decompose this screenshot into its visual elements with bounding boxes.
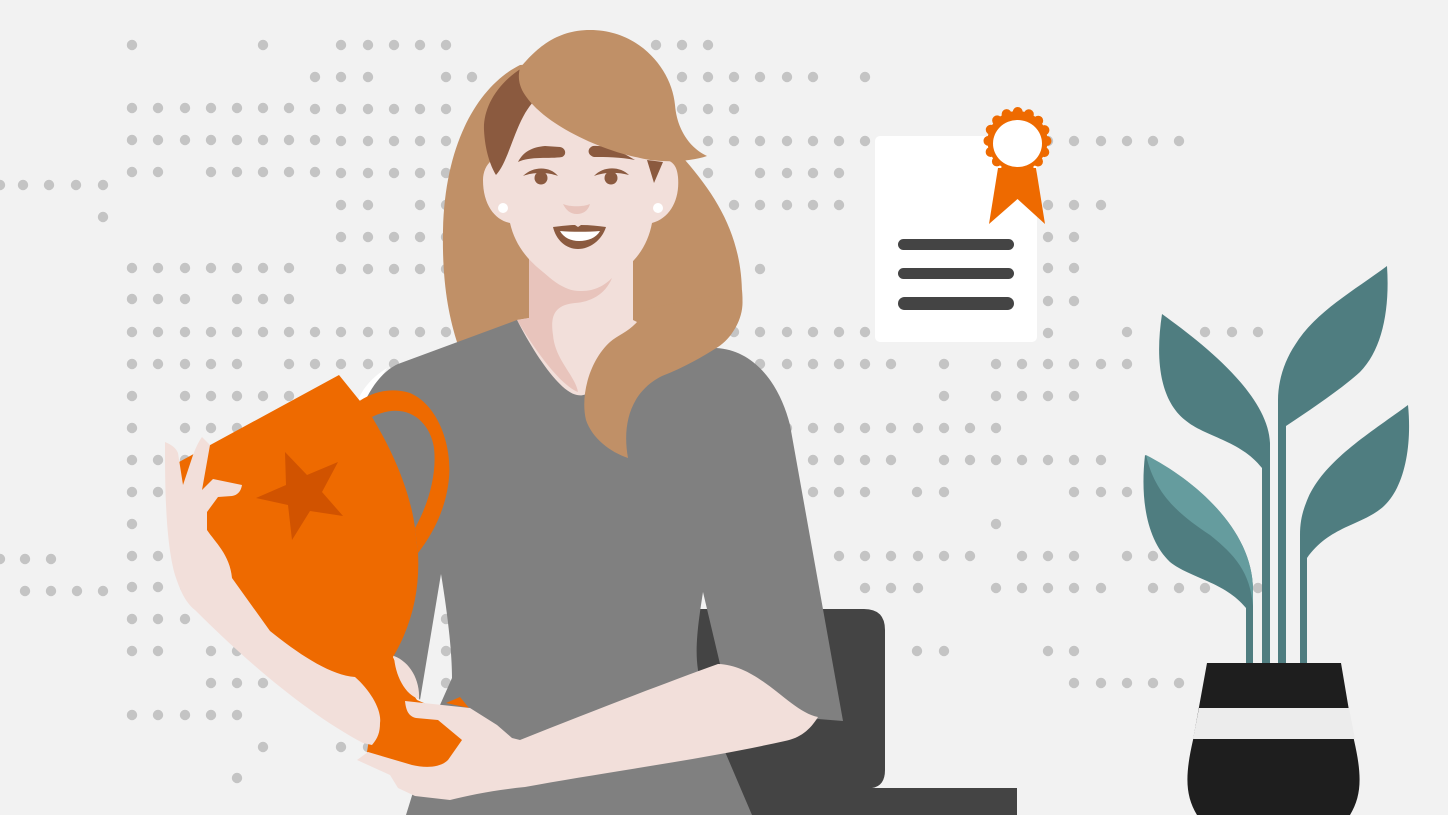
eyebrows xyxy=(518,146,635,162)
lighter leaf highlight xyxy=(1146,455,1253,606)
earrings xyxy=(498,203,663,213)
pot stripe xyxy=(1193,708,1355,739)
potted plant xyxy=(1143,266,1409,815)
front hair lock xyxy=(584,290,742,458)
right arm and hand xyxy=(357,664,818,800)
dotted world map pattern xyxy=(0,45,1258,778)
certificate text lines xyxy=(898,239,1014,310)
nose xyxy=(563,204,590,214)
hair bangs xyxy=(519,30,707,161)
neck and chest xyxy=(517,250,637,400)
dark hair strand left front xyxy=(484,68,535,175)
trophy xyxy=(175,375,470,768)
woman xyxy=(350,30,843,815)
trophy star xyxy=(256,452,343,540)
trophy base tip xyxy=(446,697,469,708)
neck shadow xyxy=(517,258,612,392)
smiling mouth xyxy=(553,225,606,249)
grey shirt xyxy=(350,320,843,815)
certificate sheet xyxy=(875,136,1037,342)
trophy bowl and stem xyxy=(175,375,470,768)
plant leaves and stems xyxy=(1143,266,1409,663)
back hair xyxy=(443,60,743,347)
left arm and hand xyxy=(165,437,380,745)
trophy handle xyxy=(358,390,449,553)
dark hair strand right xyxy=(647,160,663,183)
white highlight behind shoulder xyxy=(358,368,387,400)
rosette badge xyxy=(988,111,1048,224)
head xyxy=(483,80,678,284)
office chair xyxy=(690,609,1017,815)
plant pot xyxy=(1187,663,1360,815)
small finger on stem xyxy=(394,656,419,699)
certificate xyxy=(875,111,1048,342)
eyes xyxy=(523,168,629,184)
